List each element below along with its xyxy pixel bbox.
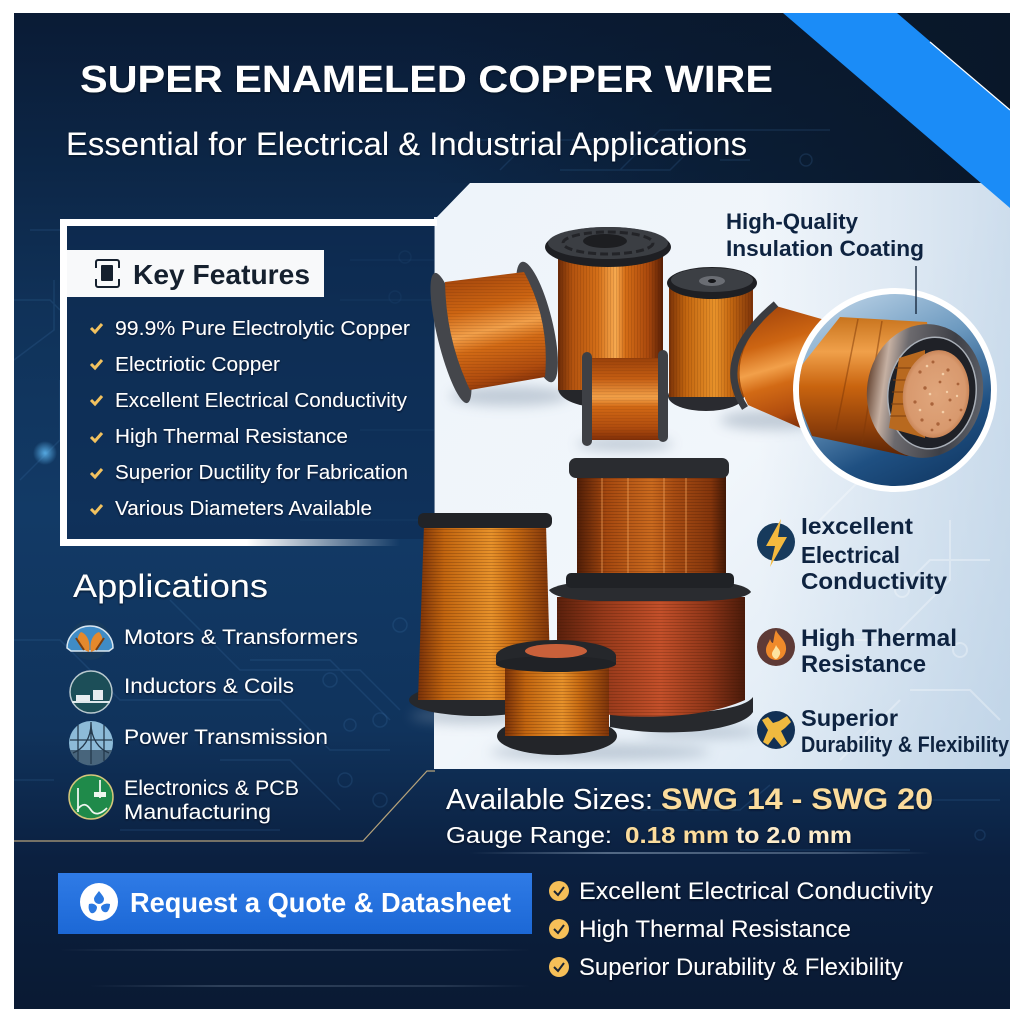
spool: small front — [582, 350, 668, 446]
spool: small front — [496, 640, 617, 755]
panel: applications list — [67, 620, 358, 824]
icon: inductors — [70, 671, 112, 713]
benefit: durability and flexibility — [757, 705, 1010, 757]
benefit: thermal resistance: High Thermal — [801, 625, 957, 652]
benefit: electrical conductivity: Electrical — [801, 542, 900, 568]
bottom benefits checklist: Excellent Electrical Conductivity — [579, 878, 933, 905]
soft spool shadows — [410, 386, 820, 760]
gauge range: Gauge Range: — [446, 822, 612, 848]
spool: back centre — [545, 227, 671, 407]
spool: wide red lower — [549, 581, 753, 732]
label: high-quality insulation coating — [726, 209, 924, 314]
feature checklist: Electriotic Copper — [115, 354, 280, 376]
applications heading: Applications — [73, 568, 268, 604]
circuit trace background pattern — [14, 130, 1000, 850]
panel: applications list: Inductors & Coils — [124, 675, 294, 698]
feature checklist: Superior Ductility for Fabrication — [115, 462, 408, 484]
magnified insulation coating lens — [790, 291, 994, 489]
feature checklist: 99.9% Pure Electrolytic Copper — [115, 318, 410, 340]
glow dot — [33, 441, 57, 465]
bottom benefits checklist: High Thermal Resistance — [579, 916, 851, 943]
benefit: thermal resistance: Resistance — [801, 651, 926, 678]
lower spool group — [409, 458, 753, 755]
title: SUPER ENAMELED COPPER WIRE — [80, 59, 773, 101]
feature checklist — [91, 318, 410, 520]
feature checklist: Various Diameters Available — [115, 498, 372, 520]
gauge range: to 2.0 mm — [736, 822, 852, 848]
icon: electronics and pcb — [69, 775, 113, 819]
blue corner ribbon — [783, 13, 1010, 208]
panel: applications list: Motors & Transformers — [124, 626, 358, 649]
upper spool group — [422, 227, 825, 446]
available sizes: SWG 14 - SWG 20 — [661, 783, 933, 816]
gauge range — [446, 822, 852, 848]
benefit: durability and flexibility: Superior — [801, 705, 898, 731]
available sizes — [446, 783, 933, 816]
benefit: electrical conductivity: Conductivity — [801, 568, 947, 594]
product photo panel — [434, 183, 1010, 769]
bottom benefits checklist: Superior Durability & Flexibility — [579, 954, 903, 981]
feature checklist: Excellent Electrical Conductivity — [115, 390, 407, 412]
label: high-quality insulation coating: High-Quality — [726, 209, 859, 234]
key features heading: Key Features — [133, 259, 310, 290]
spool: lying right — [734, 304, 825, 430]
benefit: electrical conductivity: Iexcellent — [801, 513, 913, 539]
call to action button: Request a Quote & Datasheet — [130, 887, 511, 918]
spool: back right — [667, 267, 757, 411]
spool: stacked top — [566, 458, 734, 588]
icon: motors — [67, 620, 113, 660]
bottom benefits checklist — [549, 878, 933, 981]
panel: key features — [60, 219, 437, 546]
icon: droplets — [80, 883, 118, 921]
spool: lying left — [422, 258, 567, 406]
gold divider line — [14, 771, 435, 841]
benefit: thermal resistance — [757, 625, 957, 678]
key features heading — [67, 250, 324, 297]
feature checklist: High Thermal Resistance — [115, 426, 348, 448]
benefit: electrical conductivity — [757, 513, 947, 594]
label: high-quality insulation coating: Insulation Coating — [726, 236, 924, 261]
spool: tall left — [409, 513, 552, 716]
available sizes: Available Sizes: — [446, 784, 653, 816]
panel: applications list: Manufacturing — [124, 801, 271, 824]
subtitle: Essential for Electrical & Industrial Applications — [66, 126, 747, 162]
panel: applications list: Power Transmission — [124, 726, 328, 749]
call to action button — [58, 873, 532, 934]
gauge range: 0.18 mm — [625, 822, 729, 848]
panel: applications list: Electronics & PCB — [124, 777, 299, 800]
icon: power transmission — [69, 721, 113, 765]
